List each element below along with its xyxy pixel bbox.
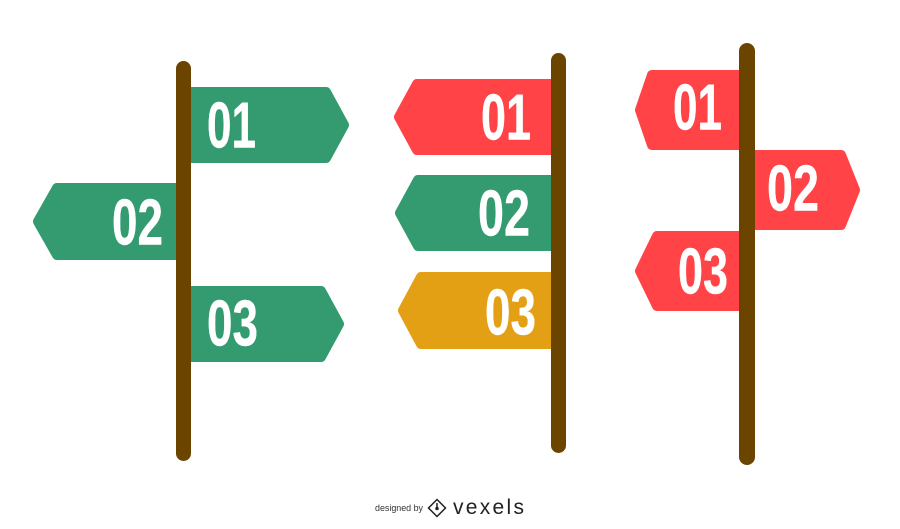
sign: orange 03: [403, 276, 556, 348]
sign: red 01: [640, 70, 745, 145]
signpost 1: [38, 61, 344, 461]
sign: green 03: [185, 286, 339, 360]
pole 3: [739, 43, 755, 465]
sign: red 02: 02: [767, 152, 819, 224]
vexels wordmark: vexels: [453, 496, 524, 519]
sign: red 03: 03: [678, 234, 728, 308]
sign: green 02: [400, 176, 556, 250]
sign: red 01: 01: [673, 70, 722, 144]
credit text: designed by: [375, 503, 423, 514]
sign: green 01: [185, 88, 344, 162]
sign: green 01: 01: [207, 88, 256, 162]
sign: green 02: 02: [112, 186, 163, 258]
signpost 3: [640, 43, 855, 465]
sign: green 02: [38, 186, 182, 258]
sign: red 01: [399, 80, 556, 154]
icon: diamond: [428, 500, 446, 516]
sign: orange 03: 03: [485, 276, 536, 348]
pole 1: [176, 61, 191, 461]
sign: red 02: [750, 152, 855, 225]
signpost 2: [399, 53, 566, 453]
sign: green 02: 02: [478, 176, 530, 250]
logo: designed by vexels: [375, 496, 524, 519]
sign: red 03: [640, 234, 745, 308]
sign: green 03: 03: [207, 286, 258, 360]
sign: red 01: 01: [481, 80, 531, 154]
pole 2: [551, 53, 566, 453]
